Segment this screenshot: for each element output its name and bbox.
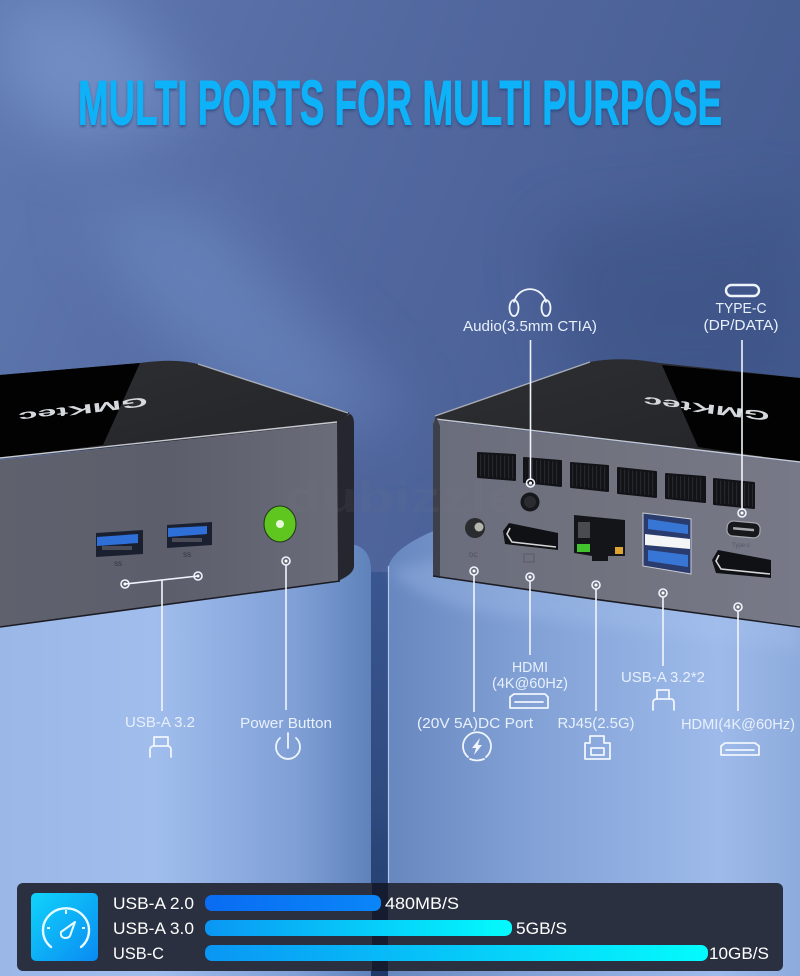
- icon: HDMI: [721, 743, 759, 755]
- gap between pedestals: [368, 572, 392, 976]
- callout: audio: Audio(3.5mm CTIA): [463, 318, 597, 335]
- left pedestal: [0, 540, 371, 976]
- callout: HDMI right: HDMI(4K@60Hz): [681, 716, 795, 733]
- USB port 1: SS: [114, 562, 122, 568]
- callout: DC port: [417, 567, 534, 760]
- bar: USB-A 2.0: [113, 894, 459, 913]
- type-c port: Type-c: [732, 543, 750, 549]
- callout: USB-A 3.2: [121, 572, 202, 757]
- icon: HDMI: [510, 694, 548, 708]
- bar: USB-A 3.0: 5GB/S: [516, 919, 567, 938]
- icon: USB plug: [150, 737, 171, 757]
- audio jack: [520, 492, 540, 512]
- USB port 2: SS: [183, 553, 191, 559]
- front face right: [433, 420, 800, 626]
- bar: USB-C: 10GB/S: [709, 944, 769, 963]
- logo right: GMKtec: [642, 394, 770, 424]
- callout: HDMI: HDMI: [512, 659, 548, 676]
- icon: bolt: [463, 732, 491, 760]
- front face left: [0, 423, 340, 627]
- icon: power: [276, 733, 300, 759]
- callout: HDMI: (4K@60Hz): [492, 675, 568, 692]
- type-c port: [726, 521, 761, 549]
- callout: USB-A 3.2*2: USB-A 3.2*2: [621, 669, 705, 686]
- callout: audio: [463, 289, 597, 487]
- logo left: GMKtec: [18, 394, 148, 425]
- power button: [264, 506, 296, 542]
- top surface left: [0, 361, 350, 459]
- USB port 2: [167, 522, 212, 559]
- callout: RJ45: [558, 581, 635, 759]
- callout: type-c: TYPE-C: [716, 300, 767, 317]
- HDMI port 2: [712, 550, 771, 578]
- callout: type-c: [704, 285, 778, 517]
- DC jack: [465, 518, 485, 559]
- DC jack: DC: [469, 553, 478, 559]
- callout: RJ45: RJ45(2.5G): [558, 715, 635, 732]
- callout: HDMI right: [681, 603, 795, 755]
- icon: USB plug: [653, 690, 674, 710]
- panel: transfer speeds: [17, 883, 783, 971]
- callout: HDMI: [492, 573, 568, 708]
- USB port 1: [96, 530, 143, 568]
- callout: USB-A 3.2: USB-A 3.2: [125, 714, 195, 731]
- bar: USB-A 3.0: [113, 919, 567, 938]
- HDMI port 1: [503, 523, 558, 562]
- icon: speedometer: [31, 893, 98, 961]
- callout: type-c: (DP/DATA): [704, 317, 778, 334]
- icon: RJ45: [585, 736, 610, 759]
- bar: USB-A 2.0: 480MB/S: [385, 894, 459, 913]
- left mini PC: [0, 361, 354, 627]
- callout: power button: [240, 557, 332, 759]
- bar: USB-A 2.0: USB-A 2.0: [113, 894, 194, 913]
- bar: USB-C: USB-C: [113, 944, 164, 963]
- icon: USB-C: [726, 285, 759, 296]
- right pedestal: [388, 530, 800, 976]
- callout: USB-A 3.2*2: [621, 589, 705, 710]
- stacked USB ports: [643, 513, 691, 574]
- bar: USB-C: [113, 944, 769, 963]
- watermark: dubizzle: [285, 473, 520, 522]
- top surface right: [435, 359, 800, 462]
- right mini PC: [433, 359, 800, 627]
- vents: [478, 453, 754, 508]
- icon: headphones: [510, 289, 550, 316]
- callout: DC port: (20V 5A)DC Port: [417, 715, 534, 732]
- bar: USB-A 3.0: USB-A 3.0: [113, 919, 194, 938]
- RJ45 port: [574, 515, 625, 561]
- callout: power button: Power Button: [240, 715, 332, 732]
